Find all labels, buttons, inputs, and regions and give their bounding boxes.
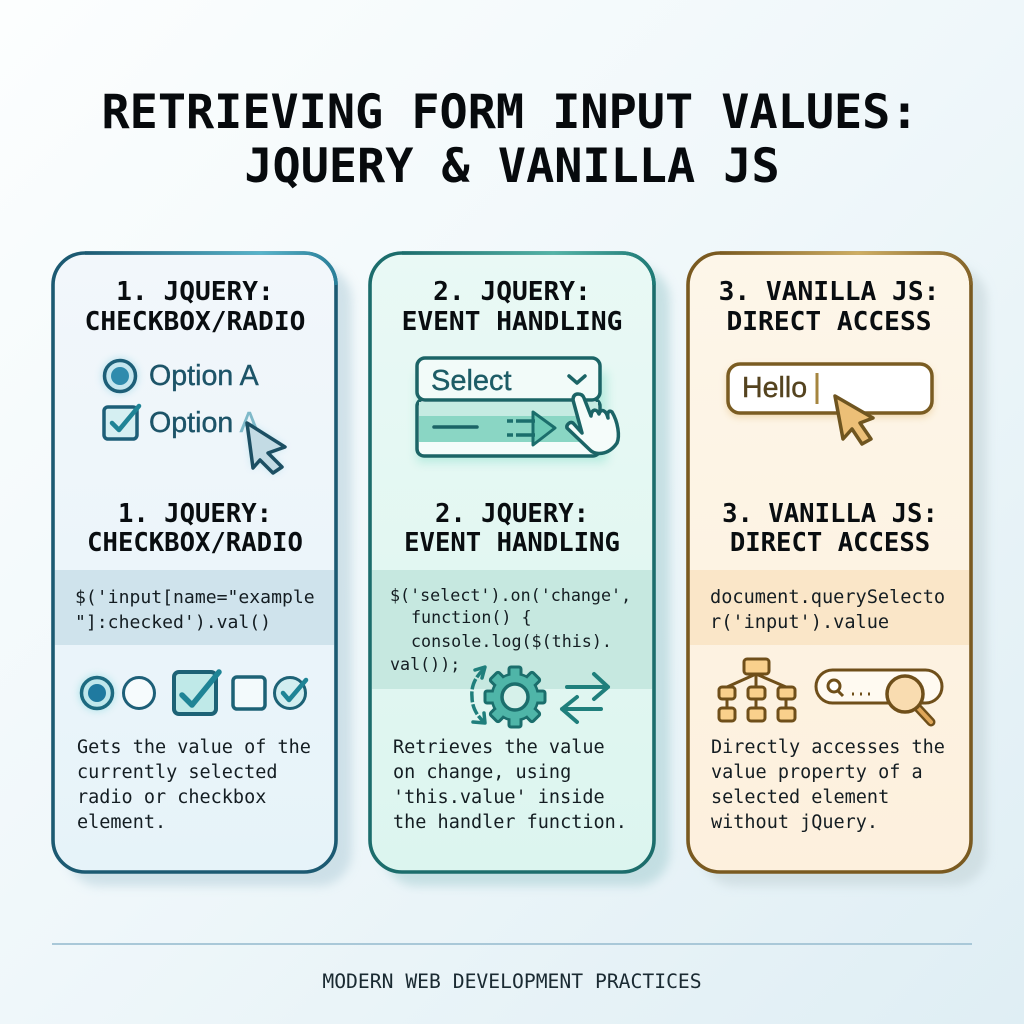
icon: text input with cursor: Hello [742, 372, 807, 404]
code 3: r('input').value [710, 612, 889, 633]
icon: text input with cursor [727, 364, 933, 444]
icon: checkbox option [104, 406, 260, 439]
panel: jQuery event handling [370, 253, 670, 886]
code 2: function() { [411, 607, 532, 627]
code band 3 [690, 570, 969, 645]
description 2 [393, 737, 627, 833]
heading 2: 2. JQUERY: [433, 277, 591, 307]
panel: vanilla JS direct access [688, 253, 987, 886]
description 1: radio or checkbox [77, 787, 266, 808]
description 3: Directly accesses the [711, 737, 945, 758]
heading 1 repeated: 1. JQUERY: [118, 499, 272, 529]
code 1 [75, 587, 315, 633]
description 2: Retrieves the value [393, 737, 605, 758]
heading 3: DIRECT ACCESS [727, 307, 931, 337]
icon: cursor [247, 423, 285, 473]
title [101, 86, 919, 194]
code 3 [710, 587, 945, 633]
heading 2 repeated [404, 499, 620, 558]
description 3: selected element [711, 787, 889, 808]
heading 3 repeated: 3. VANILLA JS: [722, 499, 938, 529]
description 2: the handler function. [393, 812, 627, 833]
icon: search bar with magnifier [816, 670, 942, 722]
heading 1 [85, 277, 305, 337]
heading 1: CHECKBOX/RADIO [85, 307, 305, 337]
heading 3 [719, 277, 939, 337]
heading 3 repeated [722, 499, 938, 558]
description 3: without jQuery. [711, 812, 878, 833]
icon: select dropdown with hand: Select [431, 365, 512, 397]
heading 2 repeated: 2. JQUERY: [435, 499, 589, 529]
code 1: "]:checked').val() [75, 612, 271, 633]
code 3: document.querySelecto [710, 587, 945, 608]
panel: jQuery checkbox/radio [53, 253, 352, 886]
icon: radio option [102, 358, 260, 394]
icon: gear with cycle arrows [472, 667, 608, 727]
code 2 [390, 585, 631, 674]
icon: radio option: Option A [149, 360, 260, 392]
description 2: 'this.value' inside [393, 787, 605, 808]
heading 2 repeated: EVENT HANDLING [404, 528, 620, 558]
heading 2: EVENT HANDLING [402, 307, 622, 337]
heading 1: 1. JQUERY: [116, 277, 274, 307]
description 1: Gets the value of the [77, 737, 311, 758]
footer: MODERN WEB DEVELOPMENT PRACTICES [322, 970, 702, 993]
code band 1 [55, 570, 334, 645]
code 1: $('input[name="example [75, 587, 315, 608]
description 3: value property of a [711, 762, 923, 783]
description 2: on change, using [393, 762, 571, 783]
description 1 [77, 737, 311, 833]
heading 2 [402, 277, 622, 337]
icon: select dropdown with hand [417, 358, 618, 462]
code 2: console.log($(this). [411, 631, 612, 651]
title: RETRIEVING FORM INPUT VALUES: [101, 86, 919, 140]
icon: checkbox option: Option A [149, 407, 260, 439]
description 3 [711, 737, 945, 833]
code 2: val()); [390, 654, 460, 674]
description 1: element. [77, 812, 166, 833]
title: JQUERY & VANILLA JS [244, 140, 780, 194]
code 2: $('select').on('change', [390, 585, 631, 605]
heading 3: 3. VANILLA JS: [719, 277, 939, 307]
description 1: currently selected [77, 762, 277, 783]
heading 1 repeated [87, 499, 303, 558]
icon: DOM tree [719, 659, 795, 721]
heading 1 repeated: CHECKBOX/RADIO [87, 528, 303, 558]
heading 3 repeated: DIRECT ACCESS [730, 528, 930, 558]
code band 2 [372, 570, 652, 689]
icon row: form controls [79, 672, 306, 714]
